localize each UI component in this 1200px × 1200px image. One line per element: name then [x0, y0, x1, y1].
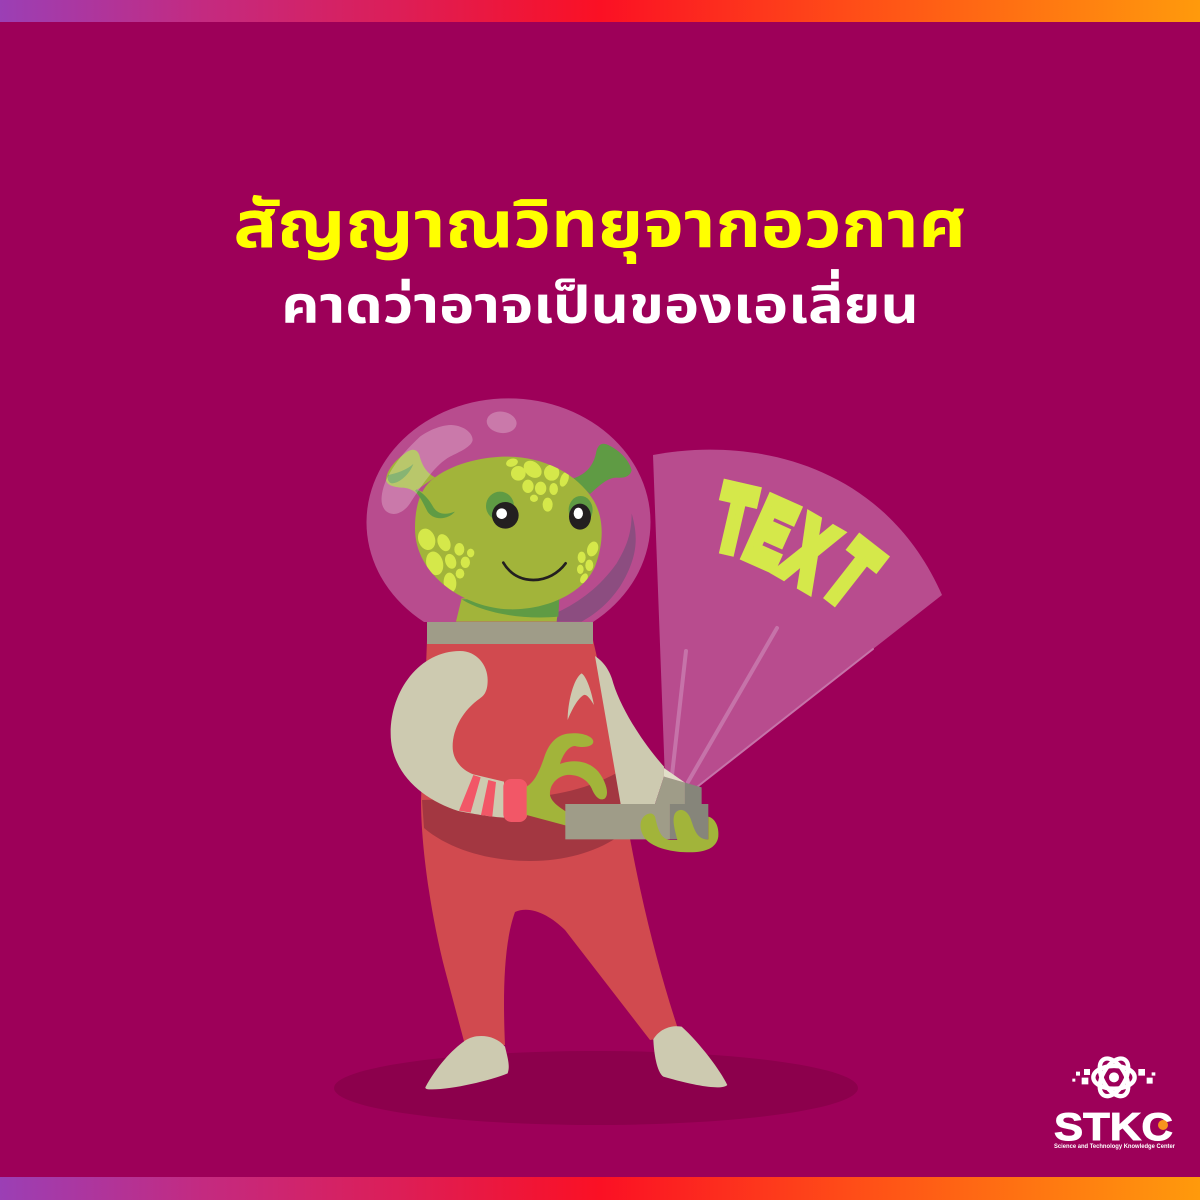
left eye — [486, 492, 519, 529]
sleeve stripes — [459, 775, 496, 817]
device body — [565, 777, 685, 839]
suit shadow band — [422, 768, 625, 861]
device dark side — [670, 783, 708, 839]
right eye — [569, 496, 593, 530]
left sleeve — [391, 651, 504, 818]
suit body — [421, 640, 680, 1045]
hologram beam — [653, 450, 942, 787]
logo atom mark — [1072, 1054, 1155, 1101]
STKC logo — [1054, 1054, 1176, 1150]
bottom gradient bar — [0, 1177, 1200, 1200]
hologram word — [707, 466, 896, 623]
collar — [427, 622, 593, 644]
hologram word: T — [808, 524, 896, 623]
right sleeve — [595, 656, 664, 804]
smile — [503, 563, 566, 580]
subtitle: คาดว่าอาจเป็นของเอเลี่ยน — [281, 269, 919, 334]
alien astronaut — [367, 398, 727, 1089]
helmet reflection — [382, 425, 473, 514]
title: สัญญาณวิทยุจากอวกาศ — [233, 187, 967, 264]
arms and device — [391, 651, 718, 852]
lower hand — [640, 810, 718, 852]
device highlight — [664, 768, 685, 783]
left ear shading — [388, 464, 455, 518]
upper hand — [527, 733, 607, 827]
left ear — [386, 450, 455, 517]
alien head — [382, 410, 636, 622]
neck — [456, 598, 559, 622]
ground shadow — [334, 1051, 858, 1125]
right shoe — [653, 1026, 727, 1087]
hologram word: E — [734, 480, 808, 586]
logo tagline: Science and Technology Knowledge Center — [1054, 1144, 1176, 1150]
hologram word: T — [707, 466, 762, 572]
head shape — [415, 457, 602, 609]
top gradient bar — [0, 0, 1200, 22]
cuff — [503, 779, 527, 822]
logo dot — [1158, 1120, 1168, 1130]
left shoe — [425, 1036, 509, 1089]
helmet glass — [367, 398, 650, 622]
neck shadow — [462, 598, 559, 617]
spots — [415, 457, 600, 593]
helmet inner shade — [557, 513, 636, 622]
helmet glint — [485, 410, 518, 435]
logo wordmark: STKC — [1054, 1105, 1173, 1148]
right ear — [573, 444, 632, 494]
hologram word: X — [768, 500, 850, 605]
suit emblem — [568, 673, 594, 720]
